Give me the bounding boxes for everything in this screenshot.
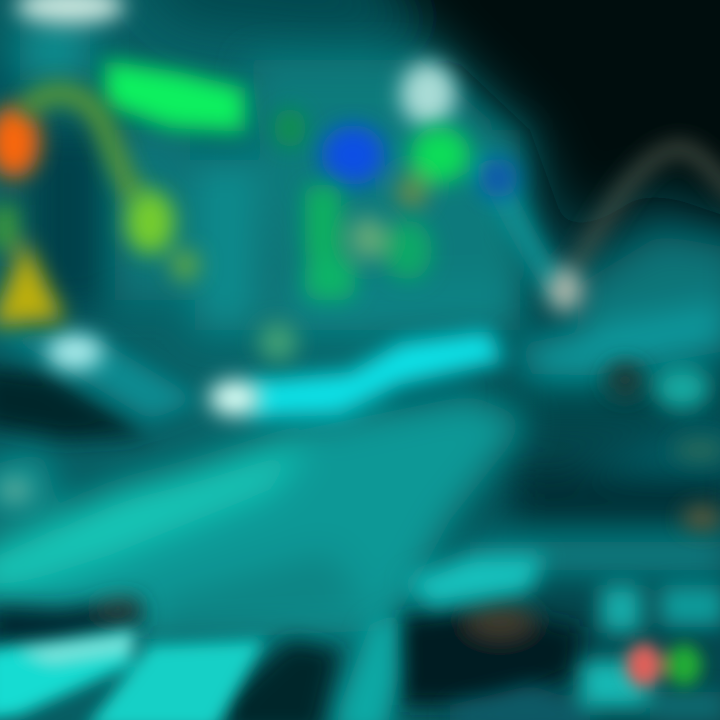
bright lower-left stripes [0,630,265,720]
white highlights [0,0,583,502]
dark shapes, bottom strip [0,362,720,720]
dark night sky, upper right [130,0,720,240]
right side teal bands [470,235,720,572]
green bar, top [105,60,245,132]
blue and green dots, top centre [321,125,518,210]
green vertical bars, centre [305,185,432,300]
upper left panel tones [0,20,530,330]
teal blocks, lower right [335,366,720,720]
red and green indicator dots, bottom right [626,643,702,687]
mountain-shaped line chart, right [490,148,720,285]
olive curve, upper left [30,93,135,195]
dark left wedge and mid shadow [0,330,470,440]
large teal sweep, lower centre [0,395,530,640]
orange and yellow markers, left [0,106,65,326]
bright cyan highlight band [250,330,505,418]
lime blobs, left centre [125,108,306,362]
